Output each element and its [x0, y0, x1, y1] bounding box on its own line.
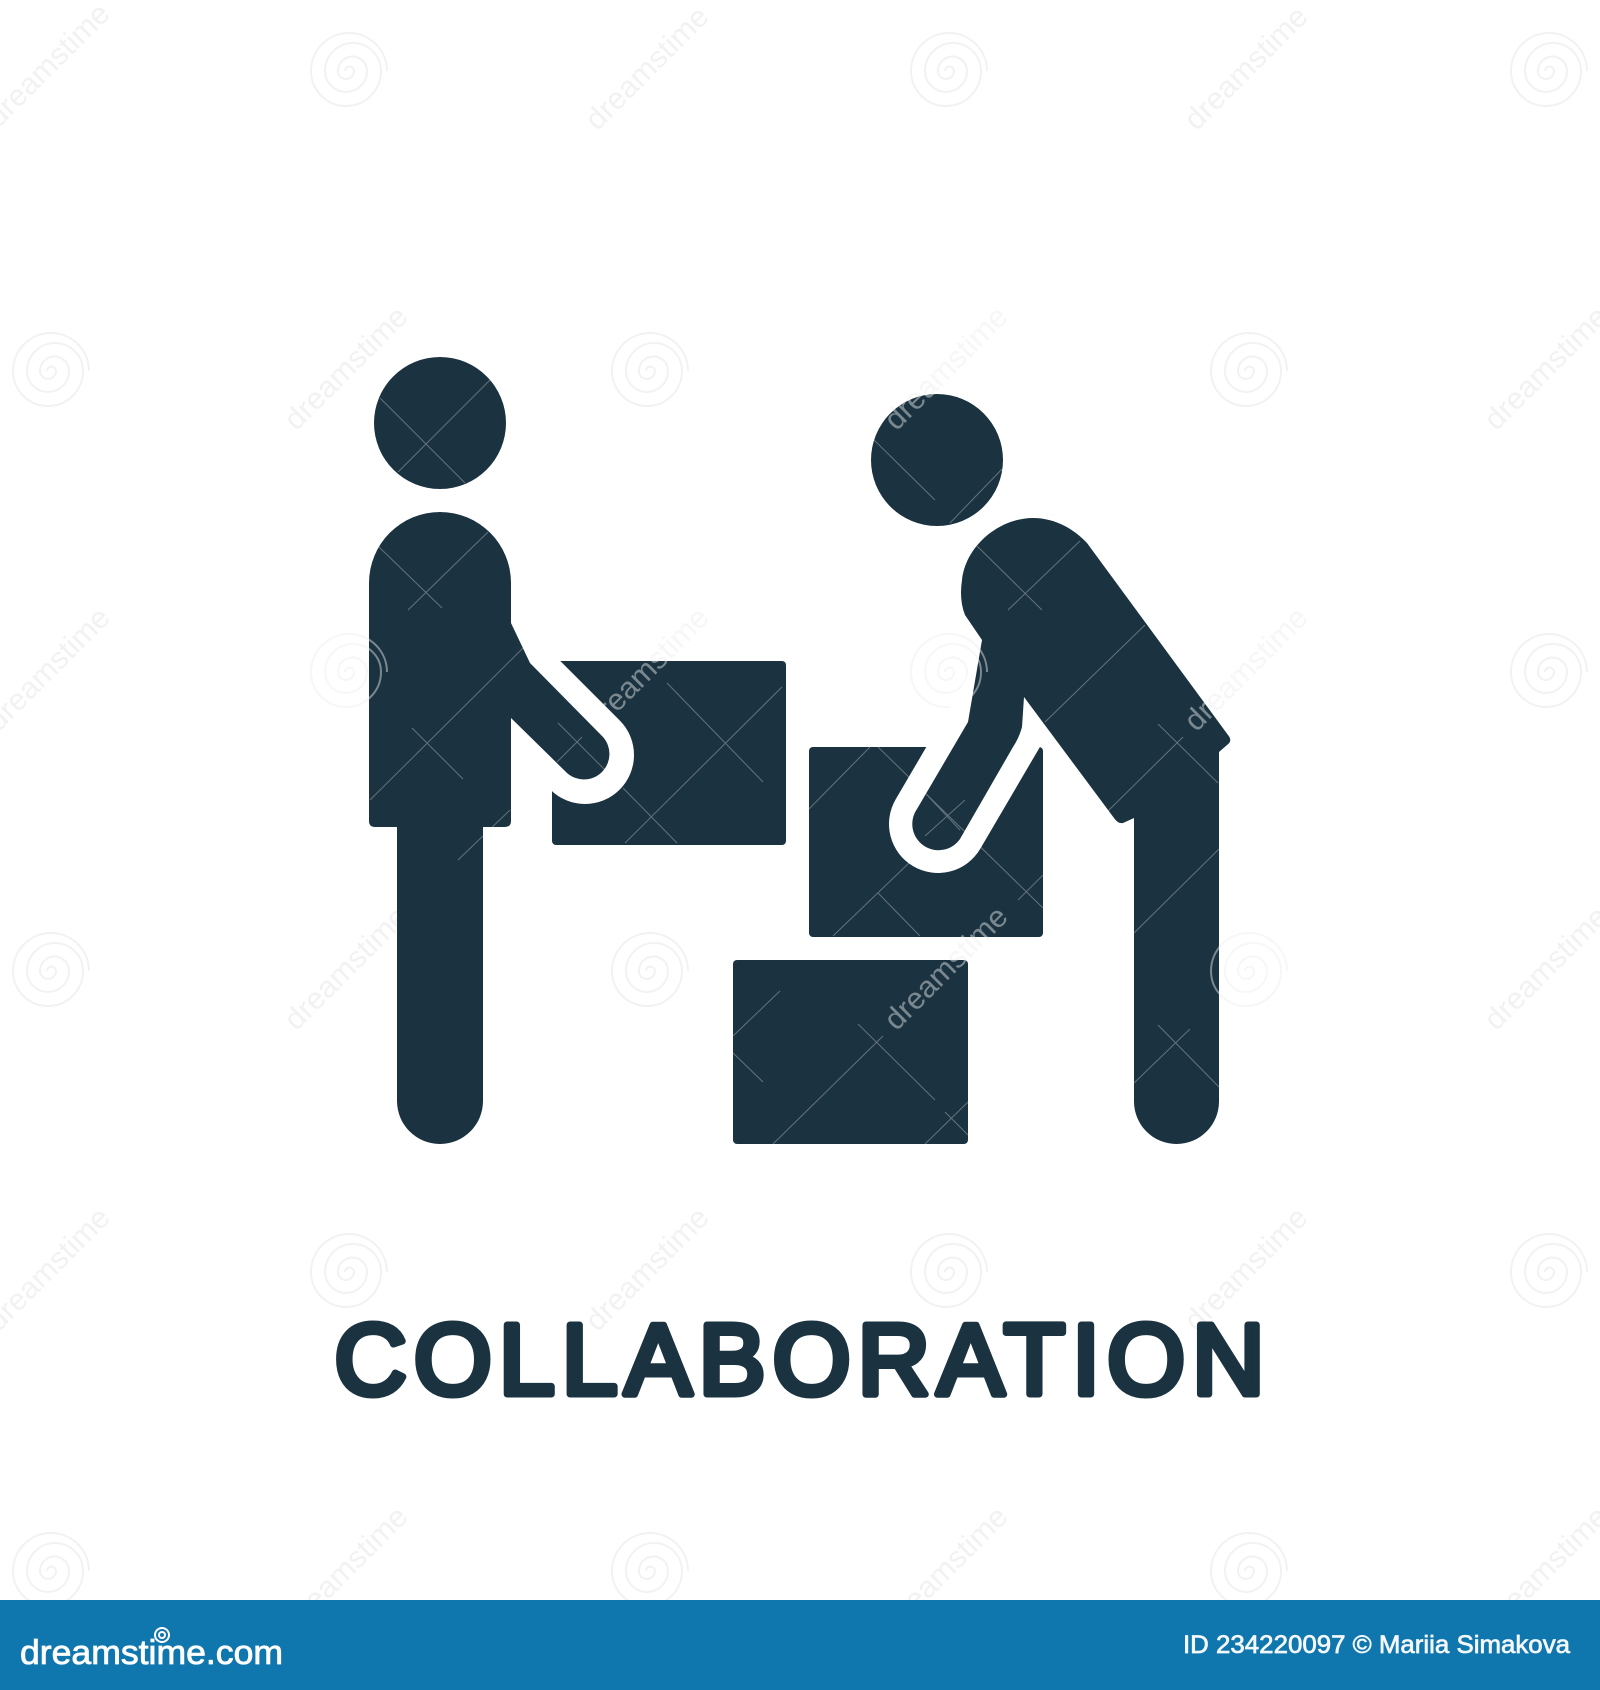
watermark pattern: rotated wordmarks: dreamstime — [1178, 0, 1315, 137]
icon: right person body — [912, 518, 1230, 1144]
icon: left person head — [374, 357, 506, 489]
watermark pattern: rotated wordmarks: dreamstime — [1178, 601, 1315, 738]
icon: white outline around right arm — [938, 667, 1030, 824]
watermark pattern: rotated wordmarks: dreamstime — [278, 900, 415, 1037]
watermark pattern: rotated wordmarks: dreamstime — [579, 601, 716, 738]
watermark pattern: rotated wordmarks: dreamstime — [878, 900, 1015, 1037]
footer image credit: ID 234220097 © Mariia Simakova — [1183, 1631, 1570, 1659]
icon: box held by left person — [552, 661, 786, 845]
watermark marks over the dark shapes: dreamstime — [579, 601, 716, 738]
watermark pattern: rotated wordmarks: dreamstime — [278, 1500, 415, 1637]
icon: box held by right person — [809, 747, 1043, 937]
watermark pattern: rotated wordmarks: dreamstime — [579, 0, 716, 137]
watermark pattern: rotated wordmarks: dreamstime — [278, 300, 415, 437]
icon: box on the ground — [733, 960, 968, 1144]
watermark lines over the dark shapes — [370, 380, 1219, 1144]
icon: white outline around left arm — [510, 680, 585, 755]
watermark marks over the dark shapes: dreamstime — [878, 300, 1015, 437]
watermark marks over the dark shapes: dreamstime — [1178, 601, 1315, 738]
icon: collaboration pictogram — [369, 357, 1230, 1144]
icon: footer logo spiral — [155, 1628, 169, 1642]
icon: right person head — [871, 394, 1003, 526]
watermark pattern: rotated wordmarks: dreamstime — [878, 1500, 1015, 1637]
watermark pattern: rotated wordmarks: dreamstime — [1178, 1201, 1315, 1338]
footer logo wordmark: dreamstime.com — [20, 1634, 283, 1672]
watermark pattern: rotated wordmarks: dreamstime — [579, 1201, 716, 1338]
watermark pattern: rotated wordmarks: dreamstime — [878, 300, 1015, 437]
icon: left person body — [369, 512, 609, 1144]
watermark marks over the dark shapes: dreamstime — [878, 900, 1015, 1037]
watermark marks over the dark shapes — [311, 300, 1315, 1037]
footer bar — [0, 1600, 1600, 1690]
title: COLLABORATION — [334, 1304, 1264, 1416]
